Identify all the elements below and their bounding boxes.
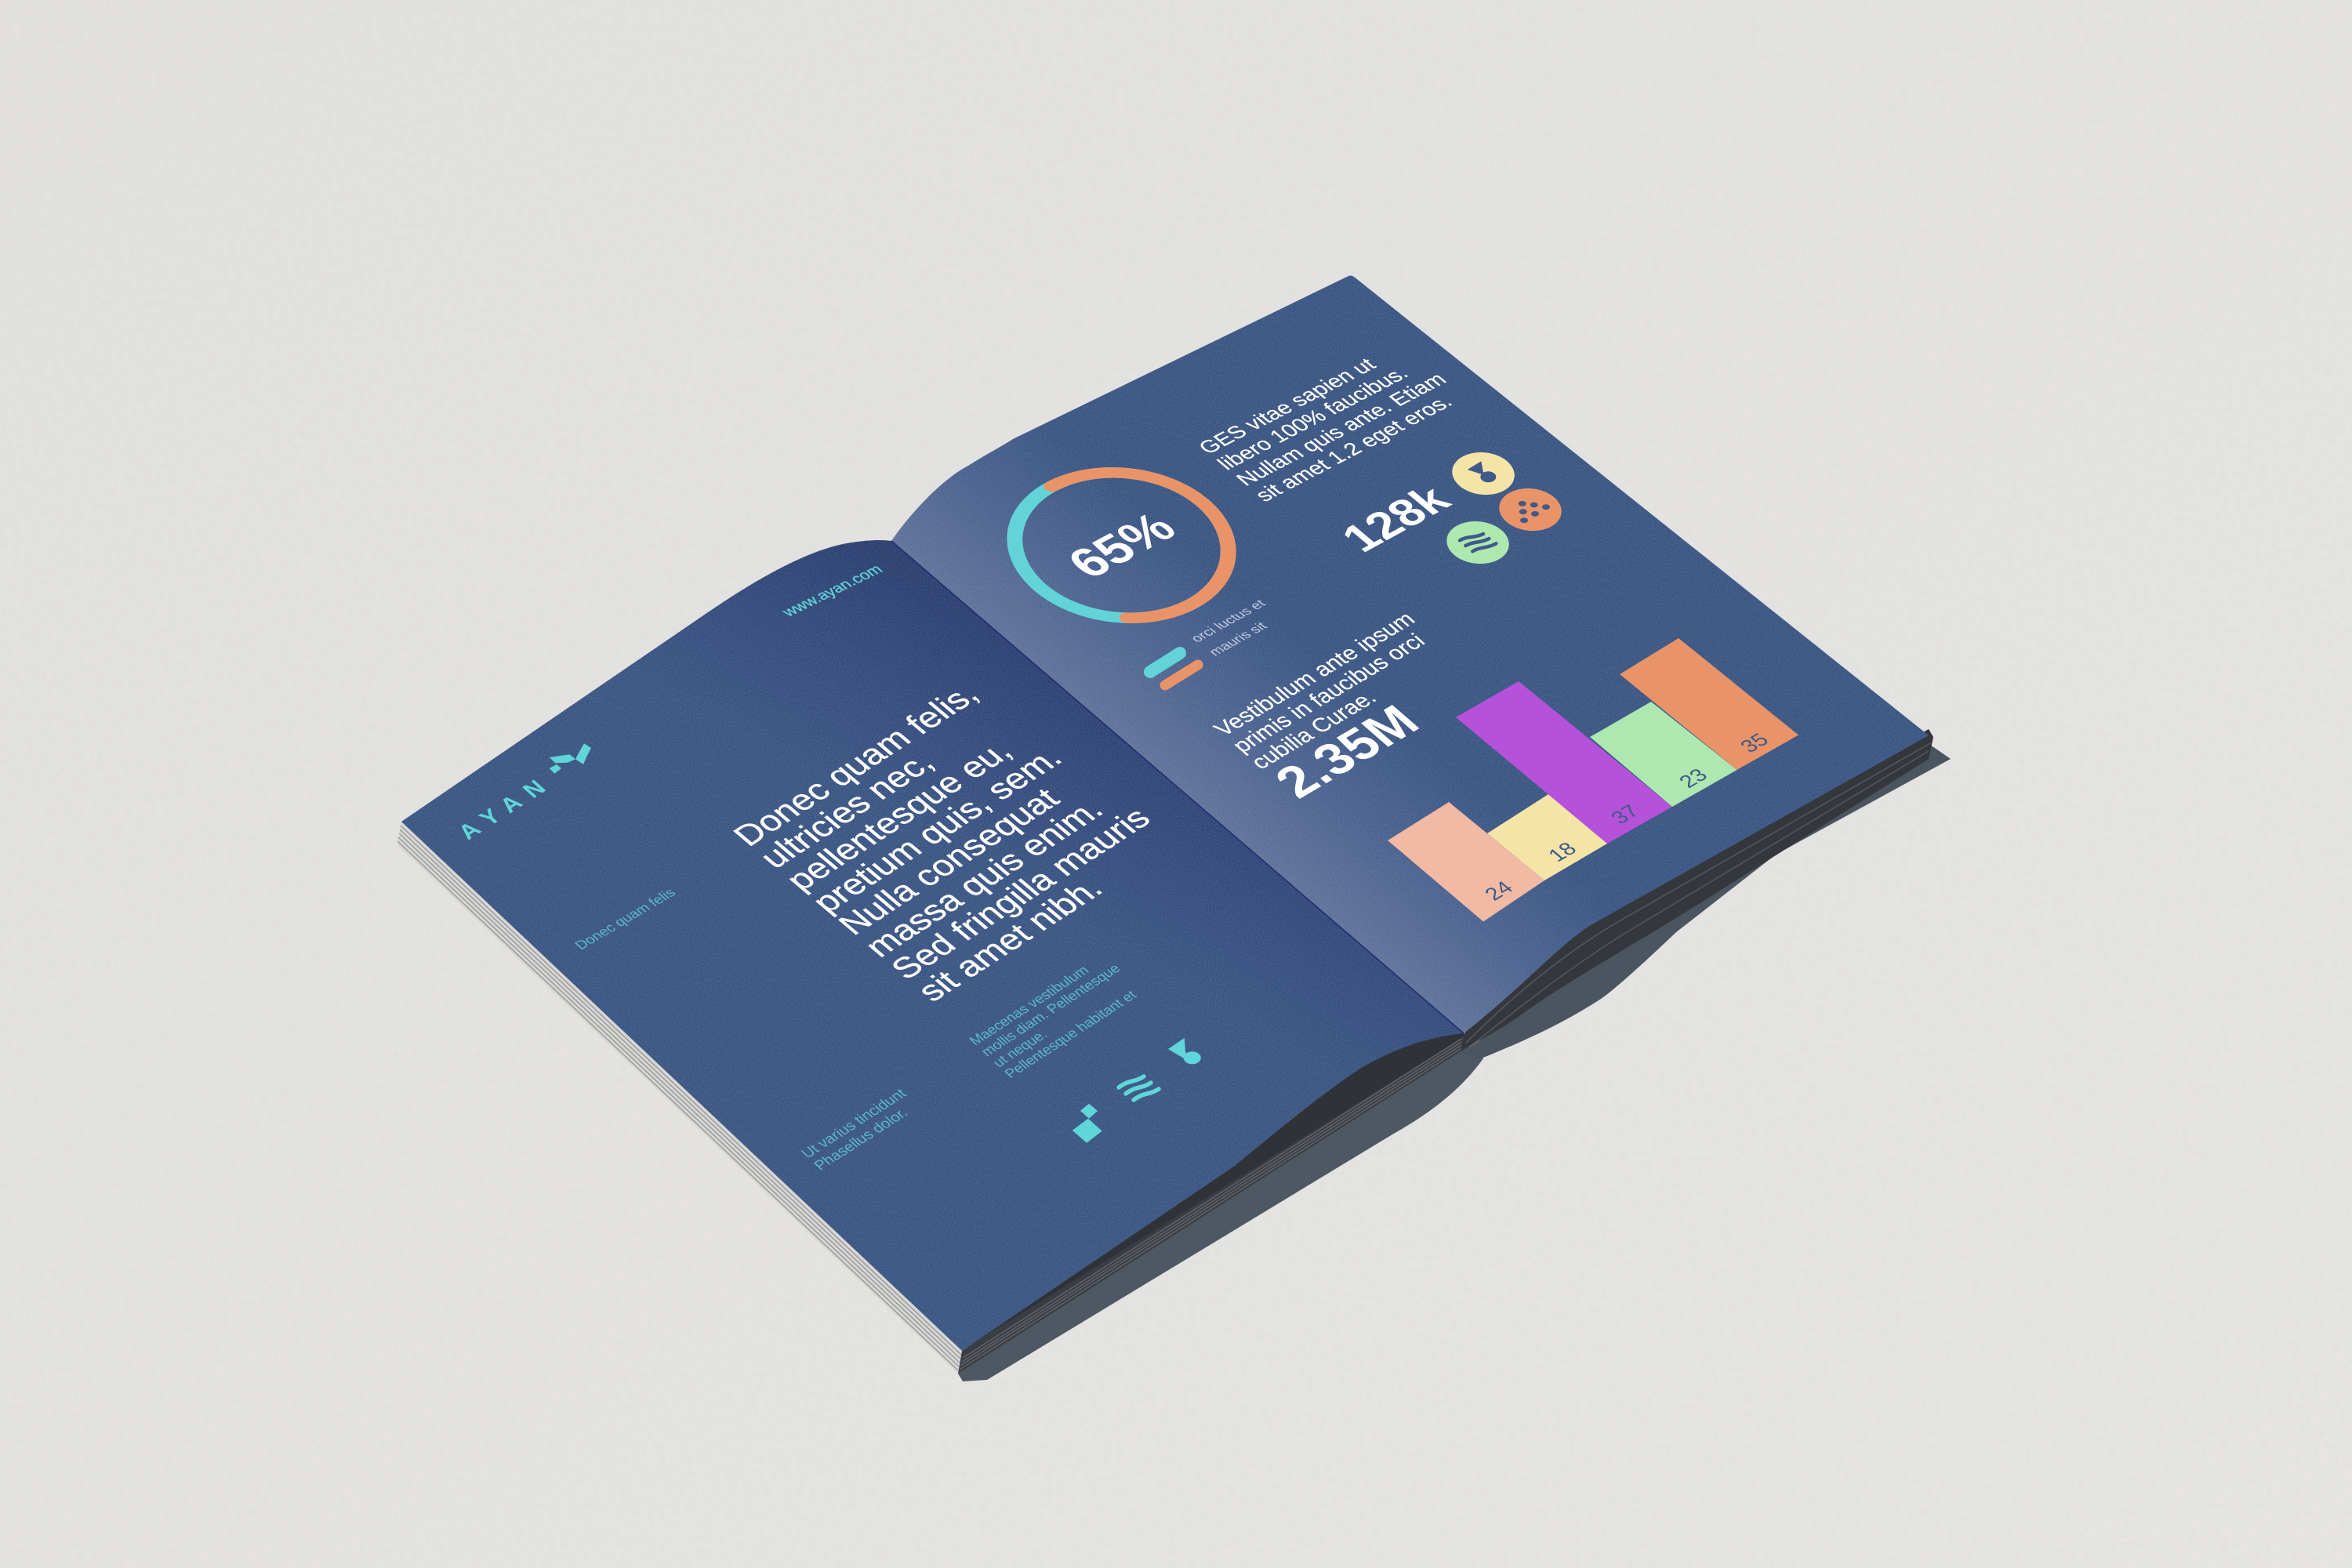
secondary teal paragraph: ut neque. xyxy=(989,1026,1051,1070)
panel: right page xyxy=(878,267,1944,1043)
legend pills xyxy=(1150,653,1198,685)
bar 35 xyxy=(1620,638,1798,770)
stat: 128k: 128k xyxy=(1330,477,1461,560)
paragraph: GES: Nullam quis ante. Etiam xyxy=(1231,368,1451,489)
donut value: 65% xyxy=(1055,503,1188,587)
small caption: Donec quam felis: Donec quam felis xyxy=(571,885,679,953)
paragraph: Vestibulum: Vestibulum ante ipsum xyxy=(1209,608,1421,741)
main headline paragraph: pellentesque eu, xyxy=(779,735,1019,897)
bar 37: 37 xyxy=(1606,800,1644,828)
logo mark xyxy=(550,743,591,774)
icon badge: green lines xyxy=(1434,513,1522,572)
secondary teal paragraph: Maecenas vestibulum xyxy=(965,962,1092,1048)
left page sheet xyxy=(376,517,1490,1372)
main headline paragraph: sit amet nibh. xyxy=(910,872,1110,1008)
bar 24 xyxy=(1388,802,1544,922)
donut teal segment xyxy=(971,444,1272,647)
bar 24: 24 xyxy=(1479,877,1518,904)
donut chart 65% xyxy=(971,444,1272,647)
bar chart xyxy=(1388,638,1798,922)
spine line xyxy=(891,541,1464,1033)
icon: stacked diamonds xyxy=(1073,1104,1102,1143)
bar 18: 18 xyxy=(1543,838,1581,866)
paragraph: GES: sit amet 1.2 eget eros. xyxy=(1250,391,1457,506)
panel: left page xyxy=(376,517,1490,1372)
bar 23: 23 xyxy=(1674,764,1712,792)
secondary teal paragraph: Pellentesque habitant et xyxy=(1000,987,1140,1081)
main headline paragraph: ultricies nec, xyxy=(753,746,942,875)
main headline paragraph: Nulla consequat xyxy=(831,782,1067,942)
main headline paragraph: massa quis enim. xyxy=(858,793,1111,964)
paragraph: GES: libero 100% faucibus. xyxy=(1212,363,1414,474)
icon: wavy lines xyxy=(1119,1076,1159,1100)
main headline paragraph: Sed fringilla mauris xyxy=(884,802,1158,985)
bar 18 xyxy=(1487,794,1607,880)
donut orange segment xyxy=(1002,444,1272,630)
bottom page stack under right page xyxy=(1461,729,1933,1051)
main headline paragraph: pretium quis, sem. xyxy=(805,742,1069,919)
logo wordmark: AYAN xyxy=(453,776,551,844)
icon badge: orange dots xyxy=(1486,480,1574,539)
website label: www.ayan.com xyxy=(779,562,887,620)
secondary teal paragraph: mollis diam. Pellentesque xyxy=(977,960,1123,1059)
legend labels: mauris sit xyxy=(1205,619,1270,658)
bar 23 xyxy=(1590,702,1737,807)
paragraph: Vestibulum: primis in faucibus orci xyxy=(1228,630,1431,757)
footer teal text: Phasellus dolor. xyxy=(811,1105,912,1174)
paragraph: GES: GES vitae sapien ut xyxy=(1193,354,1381,458)
bottom page stack under left page xyxy=(958,1031,1464,1374)
cast shadow of the booklet xyxy=(958,745,1951,1381)
footer teal text: Ut varius tincidunt xyxy=(798,1086,910,1161)
left page edge stack xyxy=(397,822,962,1374)
bar 37 xyxy=(1456,681,1672,844)
paragraph: Vestibulum: cubilia Curae. xyxy=(1246,687,1382,774)
legend labels: orci luctus et xyxy=(1187,597,1269,644)
icon badge: yellow hourglass xyxy=(1439,444,1527,503)
bar 35: 35 xyxy=(1735,729,1773,757)
right page sheet xyxy=(878,267,1944,1043)
main headline paragraph: Donec quam felis, xyxy=(726,678,986,852)
icon: hourglass ball xyxy=(1168,1038,1201,1064)
stat: 2.35M: 2.35M xyxy=(1263,696,1431,808)
